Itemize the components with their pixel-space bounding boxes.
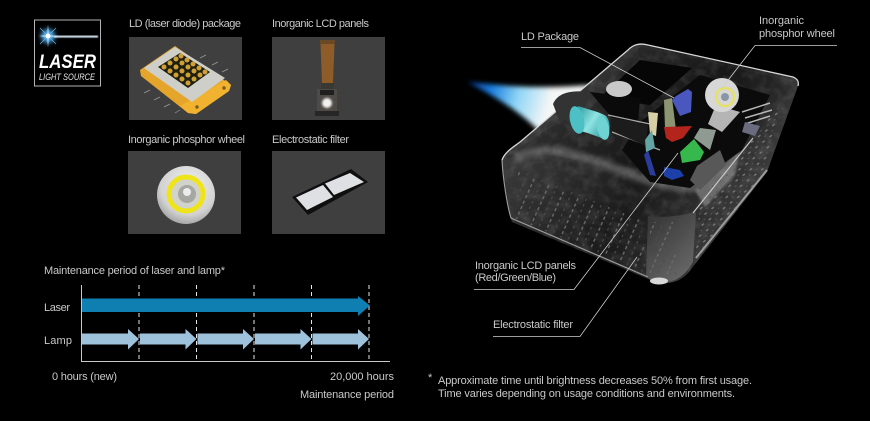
- icon: laser diode package: [140, 46, 231, 114]
- badge: laser light source: [34, 20, 100, 86]
- axis end label: 20,000 hours: [330, 371, 394, 383]
- interior top: [506, 47, 795, 205]
- lens housing: [553, 91, 590, 122]
- icon: LCD panel with ribbon: [315, 40, 339, 116]
- icon: phosphor wheel: [157, 166, 215, 224]
- callout: inorganic LCD panels: [474, 153, 678, 290]
- outline highlights: [502, 44, 798, 160]
- heading: LCD panels: Inorganic LCD panels: [272, 18, 370, 30]
- axes: [82, 285, 390, 362]
- row label: Laser: Laser: [44, 302, 70, 314]
- callout: LD Package: LD Package: [521, 31, 579, 43]
- callout: inorganic phosphor wheel: Inorganic: [759, 15, 804, 27]
- badge word LASER: LASER: [39, 52, 96, 73]
- LCD panel: blue: [672, 89, 692, 116]
- projection lens: [567, 105, 611, 141]
- axis title: Maintenance period: [300, 389, 394, 401]
- dark interior cavity: [600, 60, 692, 105]
- optical rods: [608, 115, 660, 150]
- panel: inorganic phosphor wheel: [128, 134, 245, 234]
- footnote: Approximate time until brightness decreases 50% from first usage.: [438, 375, 752, 387]
- callout: inorganic phosphor wheel: [722, 15, 837, 88]
- projector body: [502, 44, 798, 283]
- panel: LD package: [129, 18, 242, 120]
- round cap: [606, 81, 632, 97]
- heading: LD package: LD (laser diode) package: [129, 18, 241, 30]
- callout: inorganic LCD panels: Inorganic LCD panels: [475, 260, 576, 272]
- footnote: [428, 372, 752, 400]
- curved inner band: [515, 151, 705, 187]
- LCD panel: lower blue: [664, 167, 684, 180]
- icon: filter: [292, 169, 368, 215]
- pale optics: [694, 128, 716, 150]
- chart: maintenance period of laser and lamp: [44, 265, 394, 401]
- arrow: laser: [82, 296, 370, 316]
- heading: electrostatic filter: Electrostatic filter: [272, 134, 349, 146]
- callout: inorganic phosphor wheel: phosphor wheel: [759, 28, 835, 40]
- panel: inorganic LCD panels: [272, 18, 385, 120]
- foot: [650, 278, 668, 284]
- footnote: Time varies depending on usage conditions and environments.: [438, 388, 735, 400]
- row label: Lamp: Lamp: [44, 335, 72, 347]
- right side vents: [695, 100, 785, 262]
- axis start label: 0 hours (new): [52, 371, 117, 383]
- badge words LIGHT SOURCE: LIGHT SOURCE: [39, 72, 96, 82]
- callout: LD Package: [521, 31, 674, 98]
- light beam: [467, 82, 590, 130]
- footnote: *: [428, 372, 433, 384]
- LCD panel: red: [664, 126, 692, 142]
- illustration: projector cutaway: [467, 43, 800, 285]
- callout: electrostatic filter: [493, 257, 637, 336]
- optics: tall prism: [664, 98, 676, 130]
- heading: phosphor wheel: Inorganic phosphor wheel: [128, 134, 245, 146]
- front corner: [646, 212, 696, 282]
- callout: electrostatic filter: Electrostatic filter: [493, 319, 573, 331]
- chart title: Maintenance period of laser and lamp*: [44, 265, 226, 277]
- optics: cream prism: [648, 112, 658, 136]
- icon: laser flare: [39, 25, 98, 47]
- dark area around lens: [590, 92, 640, 122]
- callout: inorganic LCD panels: (Red/Green/Blue): [475, 272, 556, 284]
- period gridlines: [139, 285, 369, 361]
- phosphor wheel in projector: [705, 78, 740, 132]
- mottled surface texture: [500, 43, 800, 285]
- LCD panel: green: [680, 139, 704, 163]
- front vents: [515, 170, 650, 275]
- panel: electrostatic filter: [272, 134, 385, 234]
- arrows: lamp: [82, 329, 369, 350]
- rear connectors: [742, 103, 772, 124]
- pale inner wall: [695, 150, 740, 207]
